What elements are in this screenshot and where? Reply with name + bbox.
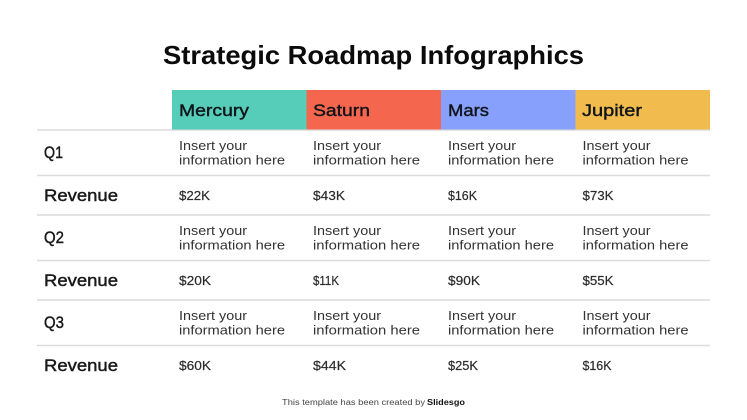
row: Q2: Insert your xyxy=(448,223,517,238)
row: Q1: information here xyxy=(179,152,285,168)
row: Q3 revenue: Revenue xyxy=(44,356,118,375)
row: Q1: information here xyxy=(313,152,420,168)
row: Q3: Insert your xyxy=(448,308,517,323)
row: Q2 revenue xyxy=(44,271,614,290)
row: Q3 revenue: $25K xyxy=(448,358,478,373)
row: Q3 revenue: $44K xyxy=(313,358,346,373)
row: Q1: Insert your xyxy=(313,138,382,153)
footer credit xyxy=(282,398,465,407)
header: Mars: Mars xyxy=(448,101,489,120)
row: Q1: Insert your xyxy=(582,138,651,153)
header: Mars xyxy=(441,90,576,130)
row: Q2: Insert your xyxy=(313,223,382,238)
row: Q2: information here xyxy=(179,238,285,252)
row: Q2 revenue: $20K xyxy=(179,273,211,288)
row: Q3: Q3 xyxy=(44,313,64,332)
header: Saturn xyxy=(306,90,441,130)
footer credit: This template has been created by xyxy=(282,398,425,407)
row: Q1 revenue: $16K xyxy=(448,188,477,203)
row: Q3: information here xyxy=(448,322,554,338)
row: Q3: Insert your xyxy=(582,308,651,323)
row: Q2 revenue: Revenue xyxy=(44,271,118,290)
row: Q3: information here xyxy=(179,322,285,338)
header: Jupiter xyxy=(576,90,710,130)
row: Q3 xyxy=(44,308,688,338)
row: Q1: Insert your xyxy=(179,138,248,153)
row: Q2 revenue: $90K xyxy=(448,273,480,288)
row: Q3 revenue: $60K xyxy=(179,358,211,373)
row: Q1: information here xyxy=(582,152,688,168)
row: Q2: Insert your xyxy=(582,223,651,238)
row: Q1: information here xyxy=(448,152,554,168)
header: Mercury xyxy=(172,90,306,130)
row: Q3 revenue xyxy=(44,356,612,375)
row: Q2 revenue: $11K xyxy=(313,273,339,288)
row: Q1 revenue: Revenue xyxy=(44,186,118,205)
row: Q2 xyxy=(44,223,688,252)
row: Q3: information here xyxy=(582,322,688,338)
row: Q3: Insert your xyxy=(313,308,382,323)
row: Q2 revenue: $55K xyxy=(582,273,614,288)
row: Q2: Q2 xyxy=(44,228,64,247)
row: Q1 revenue xyxy=(44,186,614,205)
row: Q1 revenue: $43K xyxy=(313,188,345,203)
header: Jupiter: Jupiter xyxy=(582,101,642,120)
title: Strategic Roadmap Infographics xyxy=(163,40,584,70)
row: Q2: Insert your xyxy=(179,223,248,238)
row: Q2: information here xyxy=(582,238,688,252)
row: Q3: information here xyxy=(313,322,420,338)
row: Q3 revenue: $16K xyxy=(582,358,612,373)
footer credit: Slidesgo xyxy=(427,398,465,407)
row: Q3: Insert your xyxy=(179,308,248,323)
row: Q1 revenue: $73K xyxy=(582,188,614,203)
row: Q2: information here xyxy=(313,238,420,252)
row: Q1: Insert your xyxy=(448,138,517,153)
row: Q1 revenue: $22K xyxy=(179,188,210,203)
row: Q2: information here xyxy=(448,238,554,252)
header: Saturn: Saturn xyxy=(313,101,370,120)
table header xyxy=(172,90,710,130)
header: Mercury: Mercury xyxy=(179,101,250,120)
row: Q1 xyxy=(44,138,688,168)
row: Q1: Q1 xyxy=(44,143,63,162)
